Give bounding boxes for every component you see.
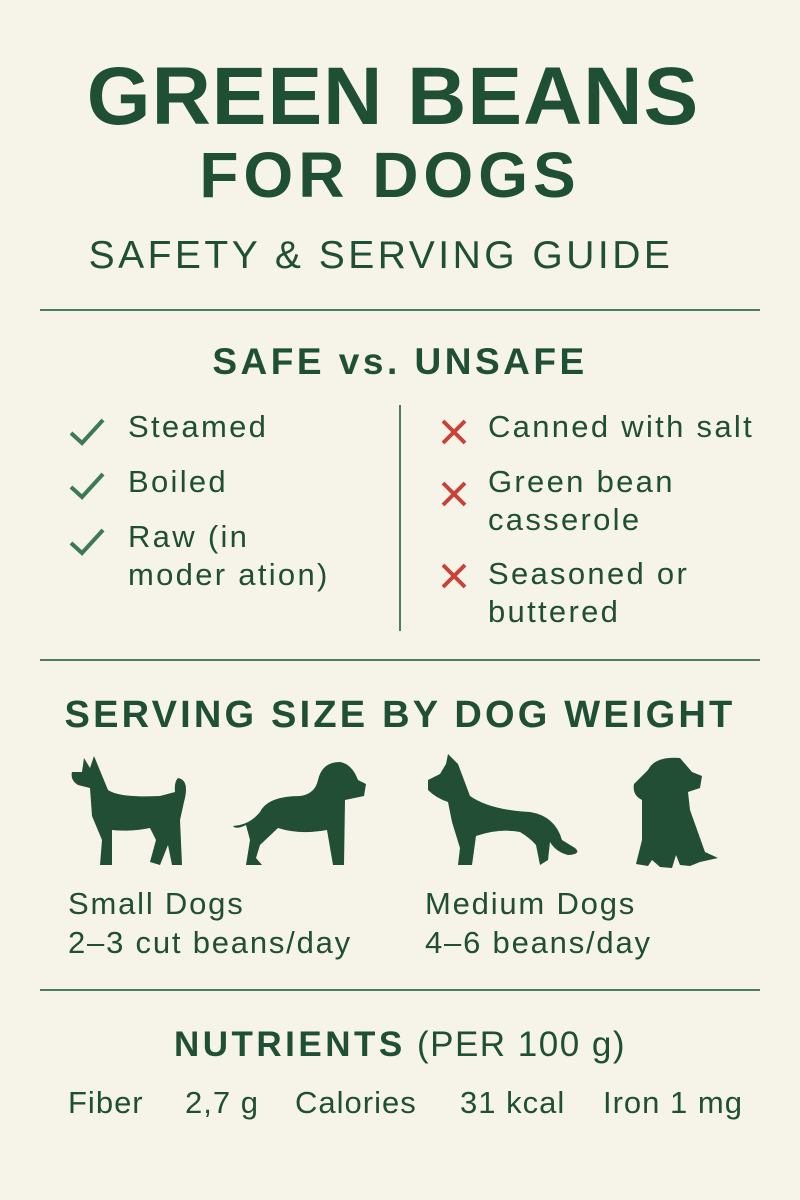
nutrient row: Calories	[295, 1085, 417, 1120]
panel: safe list: Steamed	[128, 409, 268, 444]
label: medium dogs: Medium Dogs	[425, 886, 636, 921]
tagline: SAFETY & SERVING GUIDE	[89, 234, 673, 277]
nutrient row: 31 kcal	[460, 1085, 565, 1120]
icon: check	[70, 418, 104, 446]
label: small dogs: 2–3 cut beans/day	[68, 925, 352, 960]
panel: unsafe list: buttered	[488, 594, 620, 629]
subtitle: for dogs: FOR DOGS	[199, 139, 581, 211]
panel: safe list: Raw (in	[128, 519, 249, 554]
panel: safe list: moder ation)	[128, 557, 330, 592]
nutrient row	[68, 1085, 743, 1120]
icon: check	[70, 528, 104, 556]
label: medium dogs: 4–6 beans/day	[425, 925, 652, 960]
nutrient row: Fiber	[68, 1085, 144, 1120]
heading: safe vs unsafe: SAFE vs. UNSAFE	[212, 341, 588, 382]
panel: unsafe list	[442, 409, 754, 629]
label: small dogs	[68, 886, 352, 960]
icon: x	[442, 420, 466, 444]
panel: unsafe list: casserole	[488, 502, 641, 537]
icon: check	[70, 472, 104, 500]
heading: nutrients: NUTRIENTS (PER 100 g)	[174, 1025, 626, 1064]
label: small dogs: Small Dogs	[68, 886, 244, 921]
label: medium dogs	[425, 886, 652, 960]
panel: safe list	[70, 409, 330, 592]
panel: unsafe list: Green bean	[488, 464, 675, 499]
title: GREEN BEANS	[87, 51, 699, 142]
nutrient row: Iron 1 mg	[603, 1085, 743, 1120]
icon: small dog 2	[233, 762, 366, 865]
dog silhouettes	[72, 754, 718, 868]
panel: unsafe list: Seasoned or	[488, 556, 689, 591]
icon: x	[442, 564, 466, 588]
icon: sitting dog	[634, 758, 718, 868]
icon: small dog 1	[72, 756, 186, 865]
nutrient row: 2,7 g	[185, 1085, 259, 1120]
panel: safe list: Boiled	[128, 464, 228, 499]
icon: x	[442, 482, 466, 506]
heading: serving size: SERVING SIZE BY DOG WEIGHT	[65, 694, 735, 736]
icon: medium dog 1	[428, 754, 577, 865]
panel: unsafe list: Canned with salt	[488, 409, 754, 444]
